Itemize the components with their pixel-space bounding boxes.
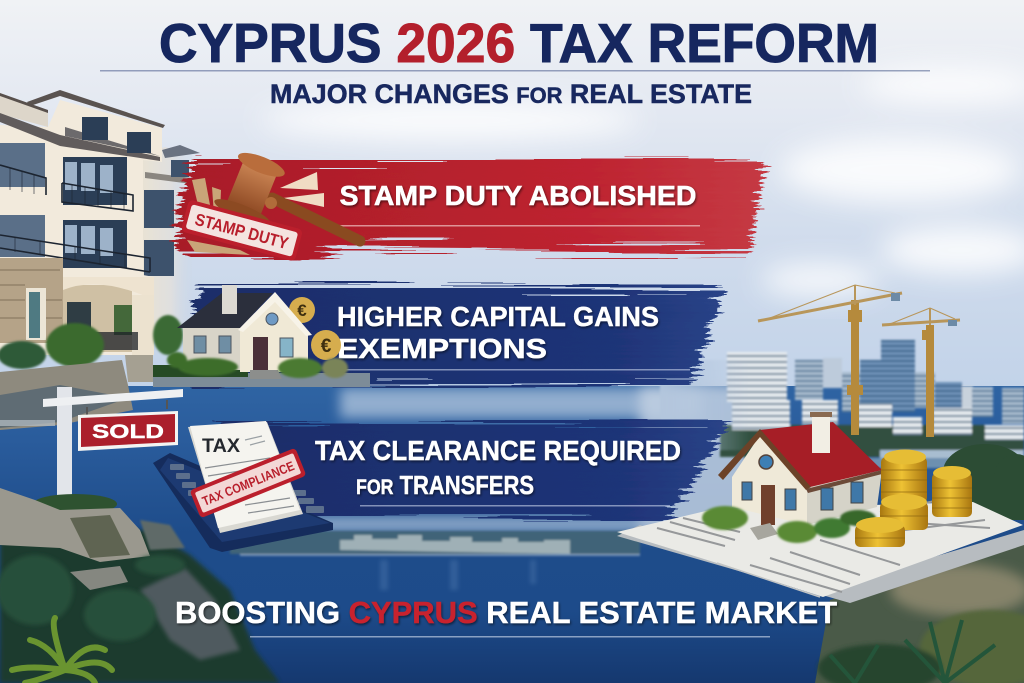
- garden and stone wall under villa: [0, 315, 183, 430]
- background: water reflections: [380, 560, 536, 590]
- icon: palm: [12, 618, 112, 683]
- background: land behind skyline: [720, 425, 1024, 468]
- background: far shore with buildings: [230, 531, 640, 556]
- icon: gold coin stacks: [855, 450, 972, 547]
- icon: sold sign: SOLD: [92, 422, 164, 443]
- main wall: [0, 100, 162, 355]
- icon: house with euro coins: €: [321, 336, 332, 357]
- skyline: [660, 340, 1024, 468]
- stone base: [0, 258, 63, 343]
- icon: gavel and stamp duty tag: [181, 146, 360, 262]
- icon: sold sign: [43, 387, 183, 509]
- villa: [0, 90, 200, 355]
- archway: [63, 285, 132, 352]
- foreground rocks behind documents: [815, 535, 1024, 683]
- panel: capital gains exemptions: [190, 286, 725, 385]
- balcony railings: [0, 165, 150, 272]
- title divider: [100, 70, 930, 72]
- heading: tax clearance: TAX CLEARANCE REQUIRED: [315, 435, 681, 466]
- tag: tax compliance: TAX COMPLIANCE: [200, 458, 297, 509]
- background: clouds: [260, 67, 1024, 296]
- closing banner text: BOOSTING CYPRUS REAL ESTATE MARKET: [175, 595, 837, 630]
- background: trees right: [943, 444, 1024, 520]
- background: pale water haze between panels: [300, 385, 750, 535]
- icon: house with euro coins: €: [297, 301, 307, 320]
- tag: stamp duty: [181, 199, 303, 262]
- house walls: [732, 435, 807, 525]
- subtitle: MAJOR CHANGES FOR REAL ESTATE: [270, 79, 752, 109]
- icon: house with euro coins: [153, 285, 370, 387]
- foreground rocks and plants left: [0, 488, 280, 683]
- right wing: [140, 147, 192, 340]
- panel: tax clearance: FOR TRANSFERS: [356, 470, 534, 500]
- icon: calculator and tax compliance document: [153, 421, 333, 552]
- tag: stamp duty: STAMP DUTY: [193, 210, 291, 253]
- house roof: [760, 422, 882, 487]
- background: sea: [0, 386, 1024, 683]
- tiled roof: [0, 113, 160, 161]
- gavel: [212, 146, 360, 241]
- closing divider: [250, 636, 770, 638]
- heading: stamp duty: STAMP DUTY ABOLISHED: [340, 180, 696, 211]
- panel: stamp duty abolished: [172, 160, 765, 258]
- icon: calculator and tax compliance document: TAX: [202, 436, 240, 457]
- heading: capital gains: HIGHER CAPITAL GAINS: [337, 301, 659, 332]
- icon: tower cranes: [758, 285, 960, 437]
- panel: tax clearance: [220, 422, 730, 517]
- title: CYPRUS 2026 TAX REFORM: [159, 12, 879, 74]
- top terrace: [0, 93, 48, 127]
- panel: capital gains exemptions: EXEMPTIONS: [337, 333, 547, 364]
- illustration: house on documents with coins: [617, 412, 1024, 603]
- background: sky: [0, 0, 1024, 420]
